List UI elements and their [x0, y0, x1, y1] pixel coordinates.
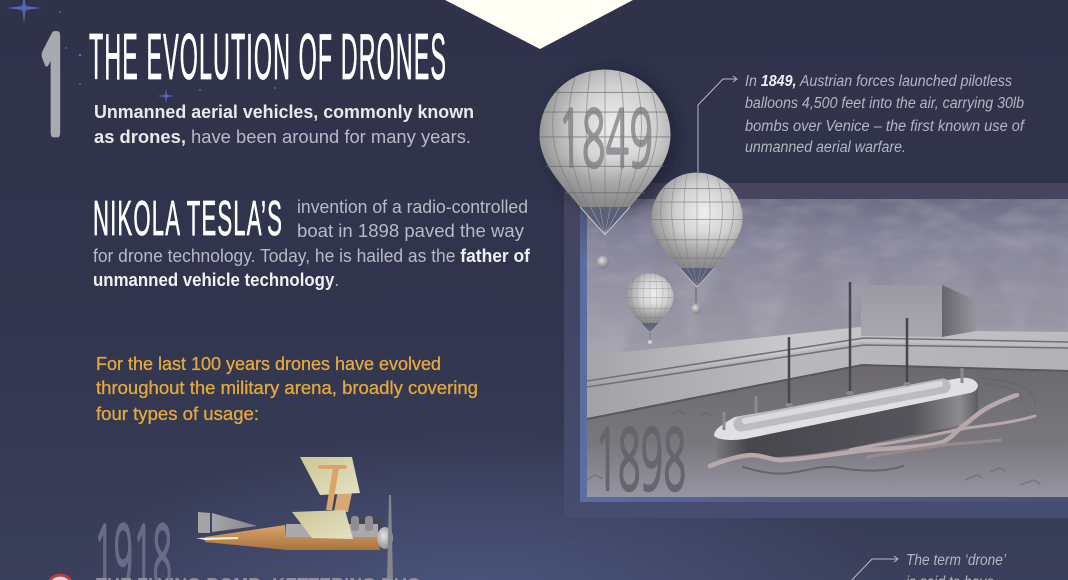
- inner blue border: [580, 199, 1068, 502]
- icon: flag badge: [47, 575, 73, 580]
- icon: biplane: [196, 457, 393, 580]
- text: 1: [35, 23, 73, 154]
- superstructure: [741, 386, 943, 424]
- intro text block: Unmanned aerial vehicles, commonly known: [94, 101, 474, 122]
- fuselage: [205, 525, 380, 550]
- callout text 1849: [745, 73, 1026, 156]
- callout text drone term: The term ‘drone’: [906, 552, 1006, 569]
- engine block: [342, 518, 382, 528]
- hull: [717, 386, 978, 458]
- year 1849: 1849: [558, 101, 653, 179]
- balloon small: [626, 274, 674, 344]
- orange text block: throughout the military arena, broadly covering: [96, 378, 478, 398]
- orange text block: For the last 100 years drones have evolved: [96, 354, 441, 374]
- front strut: [318, 465, 347, 510]
- harbour wall: [587, 327, 1068, 419]
- text: THE EVOLUTION OF DRONES: [89, 20, 447, 93]
- callout text 1849: bombs over Venice – the first known use of: [745, 118, 1026, 135]
- balloon middle: [652, 172, 742, 314]
- Tesla text block: NIKOLA TESLA’S: [93, 192, 283, 246]
- water: [587, 364, 1068, 497]
- icon: blue stars: [6, 0, 276, 104]
- boat: [714, 282, 978, 458]
- orange text block: [96, 354, 478, 424]
- callout arrow 1849: [698, 76, 737, 172]
- callout text 1849: balloons 4,500 feet into the air, carrying 30lb: [745, 95, 1024, 112]
- nose: [377, 527, 393, 549]
- Tesla text block: invention of a radio-controlled: [297, 196, 528, 217]
- building box: [861, 285, 976, 337]
- masts: [789, 282, 907, 404]
- Tesla text block: for drone technology. Today, he is hailed as the father of: [93, 245, 531, 266]
- deck: [714, 378, 978, 440]
- orange text block: four types of usage:: [96, 404, 259, 424]
- tail: [198, 512, 210, 533]
- lower wing: [292, 510, 353, 539]
- scene background: 1898: [595, 419, 686, 503]
- panel: 1898 scene: [564, 183, 1068, 518]
- callout text drone term: [906, 552, 1006, 580]
- upper wing: [300, 457, 360, 495]
- callout text 1849: unmanned aerial warfare.: [745, 139, 906, 156]
- tailplane: [196, 537, 238, 540]
- wake dark: [743, 430, 950, 474]
- water ripples: [587, 393, 1040, 486]
- Tesla text block: boat in 1898 paved the way: [297, 220, 525, 241]
- rear strut: [334, 490, 352, 512]
- Tesla text block: unmanned vehicle technology.: [93, 269, 339, 290]
- Tesla text block: [93, 192, 531, 290]
- callout text 1849: In 1849, Austrian forces launched pilotless: [745, 73, 1012, 90]
- balloon 1849: [540, 68, 678, 268]
- intro text block: [94, 101, 474, 147]
- deck posts: [724, 368, 962, 430]
- outer frame: [564, 183, 1068, 518]
- scene background: [587, 199, 1068, 503]
- icon: white diamond pointer: [445, 0, 633, 49]
- propeller: [387, 495, 393, 580]
- intro text block: as drones, have been around for many years.: [94, 126, 471, 147]
- wake: [710, 395, 1035, 466]
- callout arrow drone term: [850, 556, 898, 580]
